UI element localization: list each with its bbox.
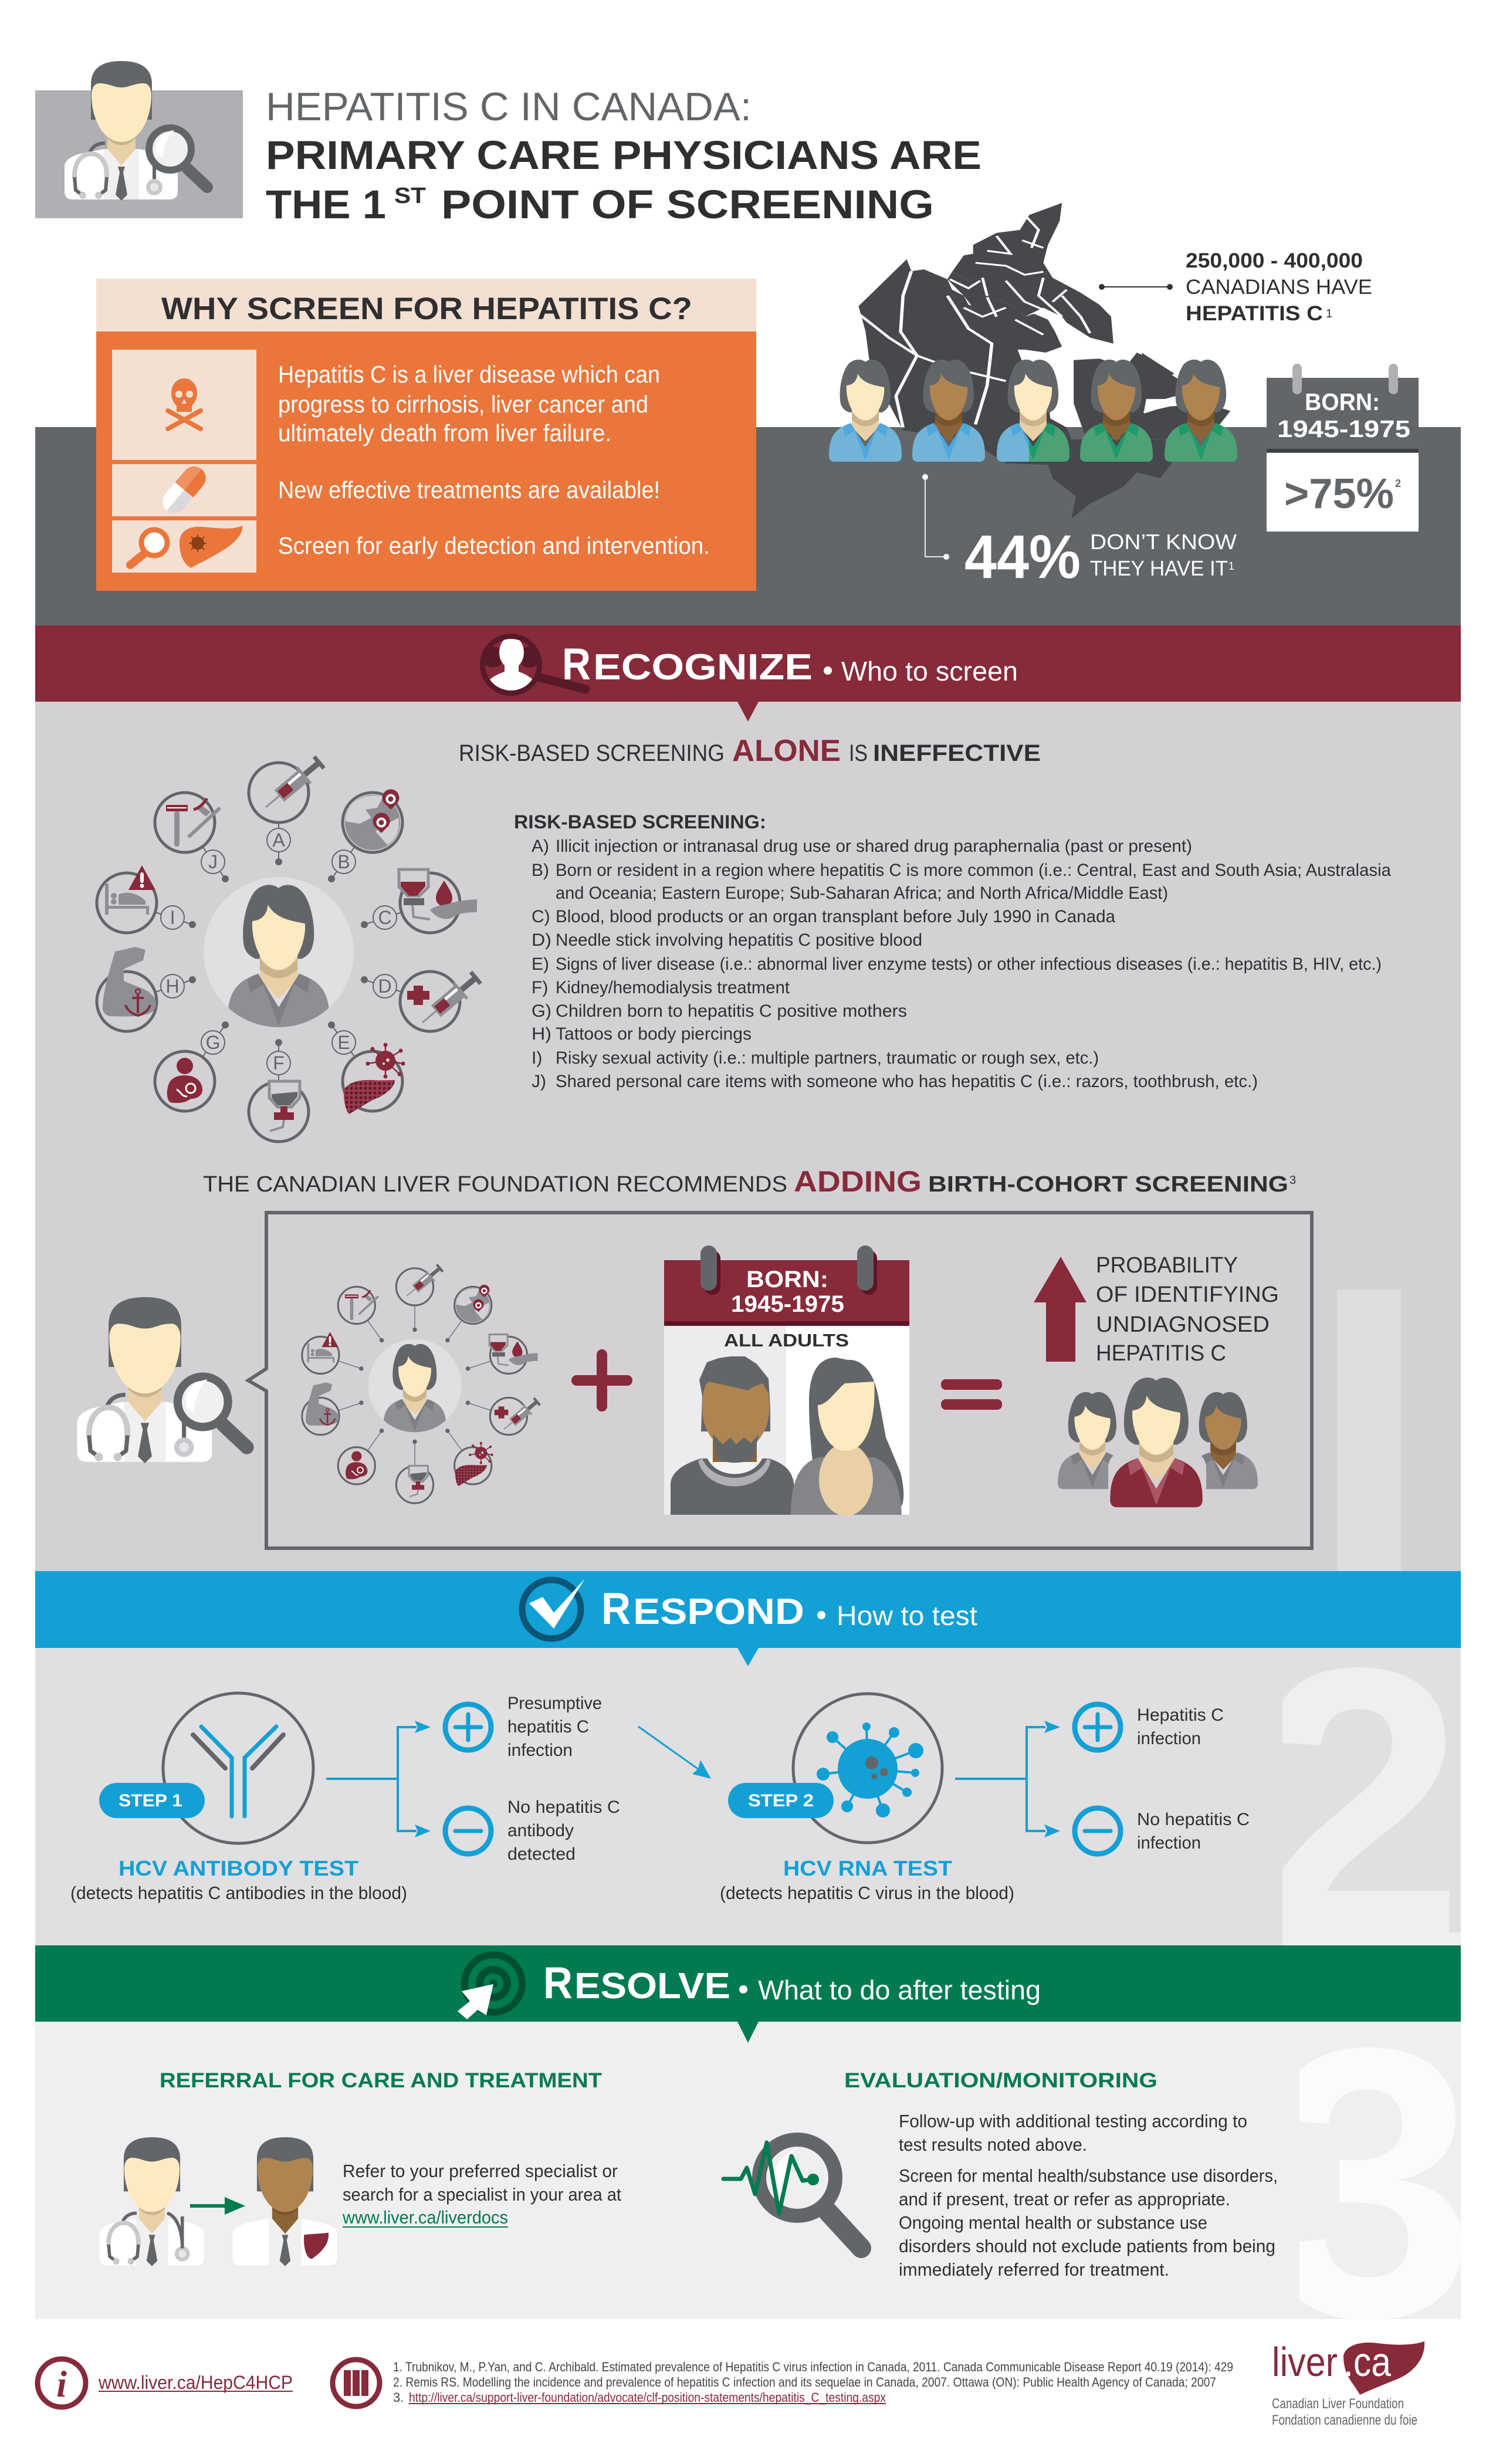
callout: 250,000-400,000 Canadians: 1 (1326, 307, 1332, 320)
title (266, 84, 981, 227)
group of three people (1058, 1377, 1258, 1508)
text block: risk-based screening list: RISK-BASED SCREENING: (514, 811, 766, 832)
text block: risk-based screening list: and Oceania; Eastern Europe; Sub-Saharan Africa; and North Africa/Middle East) (556, 884, 1168, 903)
large section number 2: 2 (1253, 1589, 1464, 2015)
text block: risk-based screening list: Blood, blood products or an organ transplant before July 1990 in Canada (556, 907, 1115, 926)
heading: risk-based screening alone is ineffective: ALONE (732, 734, 841, 768)
step 2 pill (728, 1783, 834, 1818)
up arrow (1034, 1257, 1087, 1362)
heading: respond (601, 1584, 977, 1634)
text block: evaluation (899, 2111, 1278, 2280)
heading: Canadian Liver Foundation recommendation (203, 1165, 1296, 1198)
text block: risk-based screening list: Tattoos or body piercings (556, 1024, 752, 1044)
born 1945-1975 calendar stat: BORN: (1305, 388, 1380, 415)
speech-bubble frame (248, 1213, 1312, 1548)
logo: Canadian Liver Foundation: Fondation canadienne du foie (1272, 2412, 1417, 2428)
text block: references: http://liver.ca/support-liver-foundation/advocate/clf-position-statements/hepatitis_C_testing.aspx (409, 2390, 886, 2405)
letter markers: E (337, 1032, 350, 1053)
callout: 44% don't know: 44% (964, 523, 1081, 591)
text block: risk-based screening list: Signs of liver disease (i.e.: abnormal liver enzyme tests) or other infectious diseases (i.e.: hepatitis B, HIV, etc.) (556, 955, 1382, 974)
heading: resolve: R (543, 1958, 573, 2008)
heading: respond: ESPOND (633, 1592, 804, 1632)
text block: risk-based screening list: H) (532, 1024, 551, 1044)
calendar: all adults born 1945-1975 (664, 1245, 909, 1516)
text: step 2 results: infection (1137, 1833, 1201, 1853)
icon: virus (817, 1722, 923, 1817)
step 2: HCV RNA test (720, 1694, 1014, 1903)
text: step 2 results: infection (1137, 1729, 1201, 1748)
text block: probability: PROBABILITY (1096, 1253, 1238, 1278)
text block: evaluation: test results noted above. (899, 2134, 1087, 2155)
text block: risk-based screening list: A) (532, 837, 549, 856)
text block: risk-based screening list: Kidney/hemodialysis treatment (556, 978, 790, 997)
icon: magnified person (480, 634, 585, 696)
text: step 1 results: detected (507, 1844, 576, 1864)
letter markers: B (337, 851, 350, 872)
letter markers: H (165, 976, 180, 997)
text block: evaluation: Follow-up with additional testing according to (899, 2111, 1247, 2131)
text block: risk-based screening list: Children born to hepatitis C positive mothers (556, 1001, 907, 1021)
panel background: respond (35, 1648, 1461, 1945)
heading: Canadian Liver Foundation recommendation: 3 (1289, 1174, 1296, 1187)
icon: doctor with magnifier (77, 1297, 247, 1463)
text block: evaluation: and if present, treat or refer as appropriate. (899, 2189, 1230, 2209)
arrows: step 1 results (326, 1721, 431, 1837)
heading: risk-based screening alone is ineffective: RISK-BASED SCREENING (459, 740, 725, 766)
text block: why screen: ultimately death from liver failure. (278, 419, 611, 446)
born 1945-1975 calendar stat: 1945-1975 (1277, 415, 1410, 442)
text block: evaluation: Screen for mental health/substance use disorders, (899, 2165, 1278, 2186)
dark statistics band (35, 427, 1461, 625)
text block: probability: UNDIAGNOSED (1096, 1312, 1270, 1337)
step 2 pill: STEP 2 (748, 1791, 814, 1810)
panel: why screen (96, 279, 756, 591)
icon: information (38, 2359, 86, 2407)
calendar: all adults born 1945-1975: ALL ADULTS (724, 1330, 849, 1351)
text block: references: 3. (393, 2390, 404, 2405)
icon: positive result (1075, 1704, 1121, 1750)
heading: resolve: ESOLVE (574, 1966, 730, 2006)
text: step 2 results (1137, 1705, 1250, 1853)
text block: risk-based screening list: D) (532, 930, 551, 950)
title: THE 1 (266, 182, 386, 227)
born 1945-1975 calendar stat: >75% (1284, 471, 1394, 517)
letter markers: I (170, 907, 175, 928)
text block: references: 1. Trubnikov, M., P.Yan, and C. Archibald. Estimated prevalence of Hepatitis C virus infection in Canada, 2011. Canada Communicable Disease Report 40.19 (2014): 429 (393, 2360, 1233, 2374)
text block: why screen: Hepatitis C is a liver disease which can (278, 361, 660, 388)
text block: risk-based screening list: Illicit injection or intranasal drug use or shared drug paraphernalia (past or present) (556, 837, 1192, 856)
logo: Canadian Liver Foundation: liver (1272, 2339, 1338, 2385)
icon: antibody (193, 1727, 283, 1816)
calendar: all adults born 1945-1975: 1945-1975 (731, 1291, 844, 1317)
heading: respond: R (601, 1584, 631, 1634)
large section number 3: 3 (1263, 1968, 1476, 2397)
text block: why screen (278, 361, 710, 559)
text block: evaluation: immediately referred for treatment. (899, 2259, 1169, 2280)
icon: positive result (445, 1704, 491, 1750)
text: step 1 results: Presumptive (507, 1694, 602, 1713)
text block: risk-based screening list: F) (532, 978, 548, 997)
text block: probability: HEPATITIS C (1096, 1341, 1226, 1366)
letter markers: J (208, 851, 218, 872)
text block: risk-based screening list: B) (532, 861, 549, 880)
panel background: resolve (35, 2022, 1461, 2319)
icon: negative result (445, 1808, 491, 1854)
heading: recognize: ECOGNIZE (593, 647, 813, 688)
text: step 1 results: antibody (507, 1821, 574, 1840)
text block: why screen: New effective treatments are available! (278, 476, 660, 503)
map of Canada (858, 203, 1230, 519)
banner: resolve (35, 1945, 1461, 2043)
logo: Canadian Liver Foundation (1272, 2339, 1424, 2428)
logo: Canadian Liver Foundation: .ca (1343, 2339, 1391, 2385)
title: ST (394, 184, 426, 208)
text block: risk-based screening list: C) (532, 907, 550, 926)
text block: references: 2. Remis RS. Modelling the incidence and prevalence of hepatitis C infection and its sequelae in Canada, 2007. Ottawa (ON): Public Health Agency of Canada; 2007 (393, 2375, 1216, 2389)
callout: 250,000-400,000 Canadians: CANADIANS HAVE (1186, 276, 1372, 299)
text: step 1 results (507, 1694, 620, 1864)
callout: 250,000-400,000 Canadians (1099, 249, 1372, 325)
woman figure (791, 1358, 903, 1516)
step 1 pill (99, 1783, 205, 1818)
callout: 250,000-400,000 Canadians: HEPATITIS C (1186, 302, 1323, 325)
text block: risk-based screening list: J) (532, 1072, 546, 1091)
heading: Canadian Liver Foundation recommendation: ADDING (794, 1165, 922, 1198)
text block: referral: Refer to your preferred specialist or (343, 2161, 618, 2181)
text: step 1 results: infection (507, 1741, 573, 1760)
title: PRIMARY CARE PHYSICIANS ARE (266, 133, 981, 178)
heading: resolve: What to do after testing (758, 1975, 1041, 2005)
title: POINT OF SCREENING (441, 182, 934, 227)
heading: risk-based screening alone is ineffective: INEFFECTIVE (873, 740, 1041, 766)
icon: information: i (56, 2363, 67, 2405)
panel background: recognize (35, 702, 1461, 1571)
icon: specialist doctor (232, 2137, 337, 2266)
callout: 44% don't know: DON’T KNOW (1090, 530, 1237, 554)
letter markers: C (378, 907, 392, 928)
heading: recognize (562, 639, 1018, 689)
text block: risk-based screening list (514, 811, 1391, 1091)
icon: check mark (522, 1579, 585, 1639)
label: HCV antibody test: HCV ANTIBODY TEST (119, 1856, 358, 1880)
icon: books (333, 2360, 380, 2407)
text block: referral: www.liver.ca/liverdocs (342, 2207, 508, 2228)
callout: 44% don't know (922, 474, 1237, 591)
large section number 1 (1337, 1289, 1401, 1571)
letter markers (161, 828, 397, 1075)
risk factor wheel (97, 753, 484, 1142)
text block: referral (342, 2161, 621, 2228)
logo: Canadian Liver Foundation: Canadian Liver Foundation (1272, 2396, 1404, 2412)
heading: evaluation: EVALUATION/MONITORING (844, 2069, 1157, 2092)
banner: recognize (35, 625, 1461, 722)
callout: 44% don't know: THEY HAVE IT (1090, 556, 1228, 580)
heading: recognize: Who to screen (841, 656, 1018, 686)
callout: 44% don't know: 1 (1228, 560, 1234, 572)
equals sign (941, 1379, 1002, 1410)
letter markers: F (273, 1052, 285, 1074)
arrows: step 2 results (955, 1721, 1060, 1837)
calendar: all adults born 1945-1975: BORN: (746, 1267, 828, 1292)
heading: respond: How to test (837, 1600, 977, 1631)
icon: skull and crossbones (112, 350, 256, 460)
text block: risk-based screening list: Needle stick involving hepatitis C positive blood (556, 930, 922, 950)
text block: probability (1096, 1253, 1279, 1366)
letter markers: D (378, 976, 392, 997)
heading: Canadian Liver Foundation recommendation: BIRTH-COHORT SCREENING (928, 1172, 1288, 1197)
icon: negative result (1075, 1808, 1121, 1854)
arrow: referral (190, 2197, 245, 2215)
caption: (detects hepatitis C antibodies in the blood) (70, 1883, 407, 1903)
text block: referral: search for a specialist in your area at (343, 2184, 621, 2205)
text block: risk-based screening list: G) (532, 1001, 551, 1021)
label: HCV RNA test: HCV RNA TEST (783, 1856, 952, 1880)
text: step 1 results: No hepatitis C (507, 1798, 620, 1817)
text block: probability: OF IDENTIFYING (1096, 1282, 1279, 1307)
plus sign (577, 1355, 627, 1406)
text: step 2 results: Hepatitis C (1137, 1705, 1224, 1725)
arrow: to step 2 (638, 1727, 711, 1779)
born 1945-1975 calendar stat: 2 (1395, 478, 1401, 489)
small risk wheel (302, 1263, 542, 1503)
link: website: www.liver.ca/HepC4HCP (98, 2372, 293, 2393)
text block: risk-based screening list: I) (532, 1048, 542, 1068)
large section number 2 (1282, 1667, 1461, 1945)
header icon: doctor with magnifier (35, 61, 243, 218)
heading: why screen: WHY SCREEN FOR HEPATITIS C? (161, 292, 692, 326)
heading: recognize: R (562, 639, 591, 689)
man figure (671, 1356, 794, 1515)
text block: risk-based screening list: Born or resident in a region where hepatitis C is more common (i.e.: Central, East and South Asia; Australasia (556, 861, 1391, 880)
text: step 2 results: No hepatitis C (1137, 1810, 1250, 1829)
text block: evaluation: Ongoing mental health or substance use (899, 2212, 1207, 2233)
heading: referral: REFERRAL FOR CARE AND TREATMENT (160, 2069, 602, 2092)
banner: respond (35, 1571, 1461, 1666)
text block: evaluation: disorders should not exclude patients from being (899, 2236, 1275, 2256)
step 1 pill: STEP 1 (119, 1791, 182, 1810)
caption: (detects hepatitis C virus in the blood) (720, 1883, 1014, 1903)
text block: risk-based screening list: Shared personal care items with someone who has hepatitis C (i.e.: razors, toothbrush, etc.) (556, 1072, 1258, 1091)
callout: 250,000-400,000 Canadians: 250,000 - 400,000 (1186, 249, 1363, 272)
born 1945-1975 calendar stat (1267, 364, 1419, 532)
heading: risk-based screening alone is ineffective: IS (849, 740, 868, 766)
heading: Canadian Liver Foundation recommendation: THE CANADIAN LIVER FOUNDATION RECOMMENDS (203, 1172, 787, 1197)
text block: risk-based screening list: E) (532, 955, 549, 974)
step 1: HCV antibody test (70, 1693, 407, 1903)
icon: referring doctor (99, 2137, 204, 2266)
text block: references (393, 2360, 1233, 2405)
title: HEPATITIS C IN CANADA: (266, 84, 752, 129)
text block: why screen: progress to cirrhosis, liver cancer and (278, 391, 648, 418)
icon: pill (112, 462, 256, 518)
heading: resolve (543, 1958, 1041, 2008)
icon: magnifier with ECG (723, 2140, 861, 2248)
text: step 1 results: hepatitis C (507, 1717, 589, 1737)
letter markers: A (272, 830, 285, 851)
text block: why screen: Screen for early detection and intervention. (278, 532, 710, 559)
heading: risk-based screening alone is ineffective (459, 734, 1041, 768)
letter markers: G (206, 1032, 220, 1053)
icon: target and cursor (458, 1951, 526, 2019)
text block: risk-based screening list: Risky sexual activity (i.e.: multiple partners, traumatic or rough sex, etc.) (556, 1048, 1099, 1068)
five people: 44% highlighted (829, 360, 1237, 462)
icon: magnifier and liver (112, 520, 256, 573)
